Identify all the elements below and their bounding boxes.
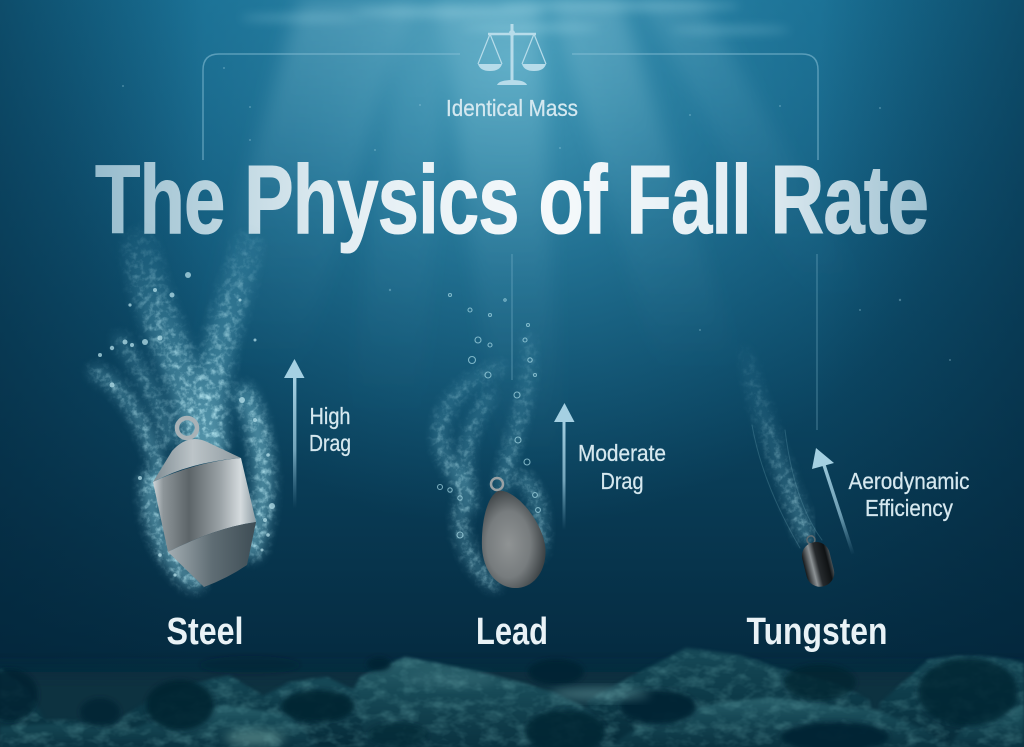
- bubbles: lead: [438, 294, 540, 538]
- arrow: moderate drag: [554, 403, 574, 530]
- wake: tungsten: [745, 350, 822, 548]
- wake: steel: [95, 245, 263, 582]
- label: high drag: High: [310, 403, 350, 429]
- steel sinker with wake: [95, 245, 275, 587]
- sinker: lead: [482, 478, 546, 588]
- sinker: tungsten: [797, 532, 837, 590]
- tungsten sinker with wake: [745, 350, 837, 590]
- material name: steel: Steel: [166, 611, 244, 653]
- label: aerodynamic efficiency: Aerodynamic: [848, 468, 970, 494]
- wake: lead: [440, 335, 541, 585]
- bubbles: steel: [98, 272, 275, 577]
- material name: tungsten: Tungsten: [746, 611, 888, 653]
- icon: balance scale: [478, 24, 546, 85]
- sinker: steel: [153, 418, 256, 587]
- seabed rocks: [0, 648, 1024, 747]
- material name: lead: Lead: [476, 611, 548, 653]
- arrow: aerodynamic efficiency: [812, 448, 853, 554]
- frame: identical mass connector lines: [203, 54, 818, 430]
- label: identical mass: Identical Mass: [446, 95, 578, 121]
- label: high drag second line: Drag: [309, 430, 351, 456]
- label: aerodynamic efficiency second line: Efficiency: [865, 495, 953, 521]
- arrow: high drag: [284, 359, 304, 508]
- label: moderate drag: Moderate: [578, 440, 666, 466]
- lead sinker with wake: [438, 294, 546, 588]
- label: moderate drag second line: Drag: [600, 468, 644, 494]
- dark boulders: [0, 656, 1018, 747]
